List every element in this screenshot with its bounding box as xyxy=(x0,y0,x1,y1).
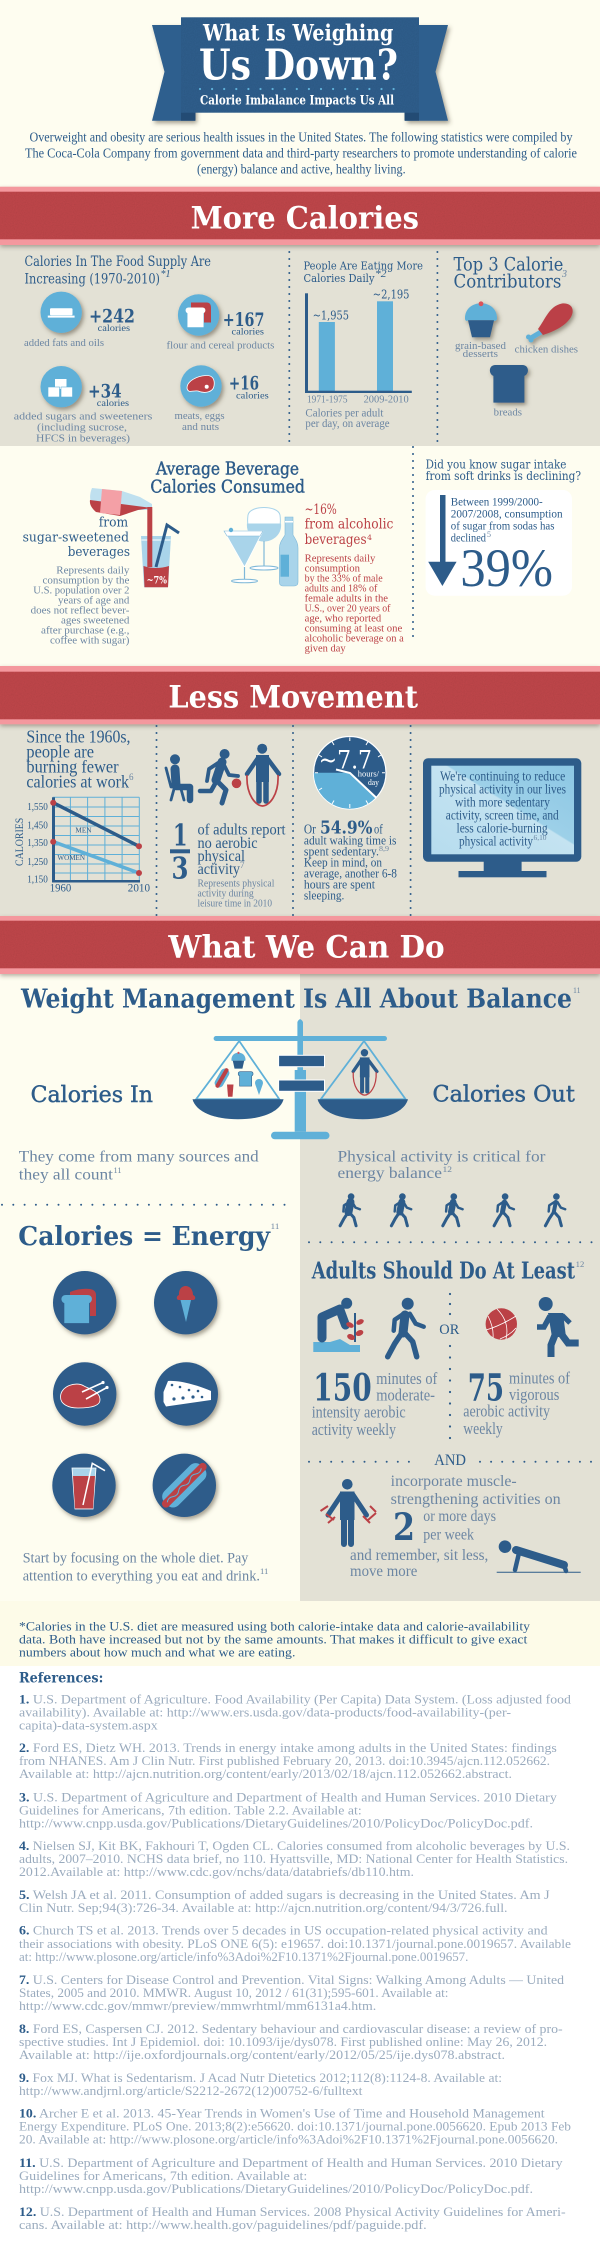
text: no aerobic activity: no aerobic xyxy=(198,835,258,852)
icon: clock: day xyxy=(368,778,379,787)
heading: since the 1960s: people are xyxy=(26,741,94,761)
text: 54.9%: Keep in mind, on xyxy=(304,855,382,870)
heading: adults should: 12 xyxy=(576,1260,584,1269)
icon: cupcake xyxy=(465,301,497,337)
icon: cheese xyxy=(155,1362,218,1426)
panel: top 3 calorie contributors xyxy=(454,254,578,419)
text: sugar-sweetened beverages: ages sweetened xyxy=(61,614,130,626)
text: muscle strengthening: and remember, sit less, xyxy=(350,1547,488,1564)
stat: 39%: 39% xyxy=(460,538,553,598)
references: 9. Fox MJ. What is Sedentarism. J Acad Nutr Dietetics 2012;112(8):1124-8. Available at: xyxy=(19,2071,502,2085)
chart caption xyxy=(305,406,390,430)
text: whole diet: attention to everything you eat and drink. xyxy=(23,1569,260,1585)
references: spective studies. Int J Epidemiol. doi: 10.1093/ije/dys078. First published online: May 26, 2012. xyxy=(19,2035,547,2049)
monitor text: less calorie-burning xyxy=(456,821,548,836)
bar chart: ~2,195 xyxy=(373,287,410,302)
stat: 150 minutes xyxy=(312,1366,438,1439)
text: alcoholic beverages: age, who reported xyxy=(305,613,382,625)
stat: 75 minutes: weekly xyxy=(463,1419,503,1438)
text: sugar-sweetened beverages: consumption by the xyxy=(42,574,130,586)
line chart: 1,550 xyxy=(27,801,48,813)
panel: calories in the food supply xyxy=(14,254,274,444)
callout text: declined xyxy=(451,532,486,544)
text: many sources: they all count xyxy=(19,1167,114,1184)
text: many sources xyxy=(19,1149,259,1184)
text: whole diet: Start by focusing on the whole diet. Pay xyxy=(23,1551,249,1567)
references: http://www.cdc.gov/mmwr/preview/mmwrhtml/mm6131a4.htm. xyxy=(19,1999,376,2013)
text: muscle strengthening: move more xyxy=(350,1563,417,1580)
item: added fats and oils: added fats and oils xyxy=(24,338,104,349)
text: alcoholic beverages: from alcoholic xyxy=(305,517,393,533)
monitor text: We're continuing to reduce xyxy=(440,769,565,784)
icon: down arrow xyxy=(428,495,457,586)
line chart: CALORIES xyxy=(14,818,26,866)
text: sugar-sweetened beverages: U.S. population over 2 xyxy=(33,584,129,596)
label: calories out: Calories Out xyxy=(432,1082,575,1107)
text: physical activity is critical xyxy=(338,1149,546,1182)
references: 5. Welsh JA et al. 2011. Consumption of added sugars is decreasing in the United States. Am J xyxy=(19,1888,550,1902)
icon: basketball xyxy=(486,1308,517,1340)
heading: calories = energy: Calories = Energy xyxy=(18,1222,271,1252)
panel: people are eating more calories daily xyxy=(304,258,423,430)
icon: chicken leg xyxy=(526,303,573,342)
references heading: References: xyxy=(19,1671,103,1687)
panel: adults should do at least xyxy=(309,1257,595,1580)
item: added fats and oils: calories xyxy=(98,323,131,333)
text: sugar-sweetened beverages: Represents daily xyxy=(56,564,130,576)
references: 7. U.S. Centers for Disease Control and Prevention. Vital Signs: Walking Among Adults — United xyxy=(19,1973,565,1987)
panel: burning fewer calories at work xyxy=(14,727,150,894)
stat: 150 minutes: intensity aerobic xyxy=(312,1402,406,1421)
stat: 75 minutes xyxy=(463,1366,570,1438)
references: http://www.cnpp.usda.gov/Publications/DietaryGuidelines/2010/PolicyDoc/PolicyDoc.pdf. xyxy=(19,2182,533,2196)
stat: one third: 1 xyxy=(173,819,188,854)
title ribbon xyxy=(152,17,448,121)
callout text: Between 1999/2000- xyxy=(451,496,543,508)
heading: top 3: Top 3 Calorie xyxy=(454,254,563,276)
text: sugar-sweetened beverages: sugar-sweetened xyxy=(23,530,129,545)
text: alcoholic beverages: given day xyxy=(305,643,346,655)
text: sugar-sweetened beverages: beverages xyxy=(68,545,130,560)
text: no aerobic activity: physical xyxy=(198,848,245,865)
stat: 75 minutes: 75 xyxy=(468,1366,504,1410)
section banner: More Calories: More Calories xyxy=(191,200,419,236)
references: 2. Ford ES, Dietz WH. 2013. Trends in energy intake among adults in the United States: findings xyxy=(19,1741,557,1755)
monitor text: physical activity in our lives xyxy=(439,782,566,797)
text: alcoholic beverages: U.S., over 20 years of xyxy=(305,603,391,615)
text: muscle strengthening: strengthening activities on xyxy=(391,1491,561,1508)
callout text: 5 xyxy=(487,530,491,539)
icon: push-up xyxy=(497,1540,581,1572)
references: http://www.andjrnl.org/article/S2212-2672(12)00752-6/fulltext xyxy=(19,2084,363,2098)
text: many sources: They come from many sources and xyxy=(19,1149,259,1166)
icon: runner with ball xyxy=(200,749,241,803)
line chart: 1,350 xyxy=(27,837,48,849)
text: muscle strengthening: 2 xyxy=(393,1505,415,1549)
icon: runner xyxy=(537,1297,579,1357)
note: leisure time: activity during xyxy=(198,889,254,900)
label: or: OR xyxy=(439,1322,459,1338)
line chart: 1,250 xyxy=(27,856,48,868)
item: added fats and oils xyxy=(24,292,135,349)
footnote: *Calories in the U.S. diet are measured using both calorie-intake data and calorie-availability xyxy=(19,1619,531,1634)
bar chart: 1971-1975 xyxy=(307,393,348,405)
text: 54.9%: of xyxy=(374,822,383,837)
heading: since the 1960s: burning fewer xyxy=(26,757,119,777)
intro text: (energy) balance and active, healthy living. xyxy=(197,161,406,176)
references: 1. U.S. Department of Agriculture. Food Availability (Per Capita) Data System. (Loss adjusted food xyxy=(19,1692,572,1706)
section banner: What We Can Do xyxy=(0,916,600,974)
item: meats, eggs and nuts: calories xyxy=(236,391,269,401)
icon: walker xyxy=(388,1298,424,1357)
references: 10. Archer E et al. 2013. 45-Year Trends in Women's Use of Time and Household Management xyxy=(19,2107,545,2121)
text: no aerobic activity xyxy=(198,822,286,878)
stat: 150 minutes: moderate- xyxy=(376,1386,435,1405)
text: alcoholic beverages: consumption xyxy=(305,563,360,575)
text: alcoholic beverages: Represents daily xyxy=(305,553,376,565)
text: muscle strengthening: or more days xyxy=(423,1508,496,1525)
heading: since the 1960s xyxy=(26,727,134,791)
item: meats, eggs and nuts: meats, eggs xyxy=(174,411,225,422)
heading: eating more: *2 xyxy=(375,269,386,280)
text: many sources: 11 xyxy=(114,1166,122,1175)
text: muscle strengthening: per week xyxy=(423,1526,474,1543)
text: sugar-sweetened beverages: after purchase (e.g., xyxy=(41,624,130,636)
item: added sugars and sweeteners: +34 xyxy=(88,380,122,402)
icon: bottle pouring into glass xyxy=(90,488,179,587)
heading: since the 1960s: 6 xyxy=(129,772,134,782)
icon: ice cream xyxy=(154,1271,217,1334)
heading: eating more: People Are Eating More xyxy=(304,258,423,272)
bar chart: 2009-2010 xyxy=(364,393,409,405)
text: muscle strengthening: incorporate muscle- xyxy=(391,1473,517,1490)
panel: sedentary waking time xyxy=(304,736,397,903)
equals sign xyxy=(279,1055,324,1091)
references: availability). Available at: http://www.ers.usda.gov/data-products/food-availability-(per- xyxy=(19,1705,511,1719)
line chart: WOMEN xyxy=(57,853,86,862)
heading: did you know: from soft drinks is declining? xyxy=(426,469,581,483)
section banner: Less Movement: Less Movement xyxy=(168,679,419,715)
references xyxy=(19,1671,572,2232)
line chart: 1,150 xyxy=(27,873,48,885)
panel: calories = energy xyxy=(18,1222,279,1585)
heading: eating more: Calories Daily xyxy=(304,271,375,285)
icon: sitting person xyxy=(166,754,190,800)
text: 54.9% xyxy=(304,817,397,903)
text: sugar-sweetened beverages: from xyxy=(99,516,128,531)
stat: one third xyxy=(170,819,190,886)
text: sugar-sweetened beverages: coffee with sugar) xyxy=(50,634,130,646)
heading: beverage calories: Calories Consumed xyxy=(150,476,305,497)
callout text: 2007/2008, consumption xyxy=(451,508,563,520)
stat: 75 minutes: aerobic activity xyxy=(463,1402,551,1421)
heading: food supply xyxy=(24,254,211,287)
line chart: 2010 xyxy=(128,880,150,894)
heading: food supply: Increasing (1970-2010) xyxy=(24,271,160,287)
heading: food supply: Calories In The Food Supply Are xyxy=(24,254,211,270)
contributor labels: desserts xyxy=(463,349,498,360)
heading: since the 1960s: Since the 1960s, xyxy=(26,727,130,747)
text: 54.9%: spent sedentary. xyxy=(304,844,379,859)
icon: gardener xyxy=(313,1298,365,1352)
intro text xyxy=(25,129,577,176)
references: Guidelines for Americans, 7th edition. Available at: xyxy=(19,2169,307,2183)
text: 54.9%: average, another 6-8 xyxy=(304,866,397,881)
text: no aerobic activity: of adults report xyxy=(198,822,286,839)
callout box xyxy=(426,490,572,596)
text: 54.9%: Or xyxy=(304,822,316,837)
monitor shape xyxy=(423,758,581,877)
text: alcoholic beverages: alcoholic beverage on a xyxy=(305,633,404,645)
heading: since the 1960s: calories at work xyxy=(26,771,129,791)
references: http://www.cnpp.usda.gov/Publications/DietaryGuidelines/2010/PolicyDoc/PolicyDoc.pdf. xyxy=(19,1816,533,1830)
item: added sugars and sweeteners: calories xyxy=(97,398,130,408)
text: whole diet xyxy=(23,1551,268,1585)
heading: top 3: Contributors xyxy=(454,271,561,293)
heading: calories = energy: 11 xyxy=(271,1222,279,1231)
item: flour and cereal products xyxy=(166,294,274,351)
title ribbon: Us Down? xyxy=(199,40,398,89)
heading: top 3: 3 xyxy=(561,269,567,280)
item: flour and cereal products: flour and cereal products xyxy=(166,340,274,351)
icon: soft drink xyxy=(52,1454,116,1517)
panel: one third of adults xyxy=(166,744,286,910)
panel: average beverage calories consumed xyxy=(23,458,404,655)
contributor labels xyxy=(455,341,578,419)
right pan with jumper xyxy=(318,1041,408,1119)
heading: beverage calories xyxy=(150,458,305,497)
text: alcoholic beverages: female adults in the xyxy=(305,593,388,605)
footnote: data. Both have increased but not by the same amounts. That makes it difficult to give exact xyxy=(19,1632,528,1647)
line chart: MEN xyxy=(75,825,92,834)
heading: weight management: 11 xyxy=(573,986,580,995)
chart caption: per day, on average xyxy=(305,416,390,430)
text: alcoholic beverages: consuming at least one xyxy=(305,623,402,635)
text: no aerobic activity: activity xyxy=(198,861,240,878)
references: 3. U.S. Department of Agriculture and Department of Health and Human Services. 2010 Dietary xyxy=(19,1790,558,1804)
item: added fats and oils: +242 xyxy=(89,306,135,328)
note: leisure time xyxy=(198,879,275,910)
item: meats, eggs and nuts: +16 xyxy=(229,373,259,395)
line chart: 1,450 xyxy=(27,819,48,831)
stat: 150 minutes: activity weekly xyxy=(312,1420,397,1439)
text: alcoholic beverages: 4 xyxy=(367,534,373,542)
text: whole diet: 11 xyxy=(260,1567,268,1576)
panel: computer monitor xyxy=(423,758,581,877)
left pan with foods xyxy=(192,1041,284,1119)
references: Available at: http://ije.oxfordjournals.org/content/early/2012/05/25/ije.dys078.abstract. xyxy=(19,2048,505,2062)
item: added sugars and sweeteners: (including sucrose, xyxy=(37,422,127,433)
references: capita)-data-system.aspx xyxy=(19,1719,159,1733)
icon: wine, martini and beer bottle xyxy=(224,508,298,586)
monitor text: physical activity xyxy=(459,834,533,849)
references: 11. U.S. Department of Agriculture and Department of Health and Human Services. 2010 Dietary xyxy=(19,2156,563,2170)
heading: food supply: *1 xyxy=(160,269,170,280)
references: Clin Nutr. Sep;94(3):726-34. Available at: http://ajcn.nutrition.org/content/94/3/726.full. xyxy=(19,1901,507,1915)
icon: bread xyxy=(53,1271,116,1334)
chart caption: Calories per adult xyxy=(305,406,384,420)
note: leisure time: Represents physical xyxy=(198,879,275,890)
icon: clock: ~7.7 xyxy=(319,746,372,775)
item: meats, eggs and nuts xyxy=(174,365,269,433)
text: sugar-sweetened beverages: does not reflect bever- xyxy=(31,604,130,616)
text: 54.9%: adult waking time is xyxy=(304,833,396,848)
item: added sugars and sweeteners xyxy=(14,366,152,444)
heading: beverage calories: Average Beverage xyxy=(155,458,299,479)
text: 54.9%: 8,9 xyxy=(379,844,389,853)
label: calories in: Calories In xyxy=(31,1083,153,1108)
monitor text xyxy=(439,769,566,849)
section banner: Less Movement xyxy=(0,666,600,724)
references: Guidelines for Americans, 7th edition. Table 2.2. Available at: xyxy=(19,1803,362,1817)
panel: sugar intake declining xyxy=(426,457,581,598)
references: States, 2005 and 2010. MMWR. August 10, 2012 / 61(31);595-601. Available at: xyxy=(19,1986,449,2000)
monitor text: 6,10 xyxy=(534,833,547,842)
callout text: of sugar from sodas has xyxy=(451,520,555,532)
references: their associations with obesity. PLoS ONE 6(5): e19657. doi:10.1371/journal.pone.0019657. Available xyxy=(19,1937,571,1951)
line chart xyxy=(14,797,150,894)
heading: did you know xyxy=(426,457,581,483)
icon: dumbbell lifter xyxy=(320,1479,376,1544)
stat: 75 minutes: minutes of xyxy=(509,1368,570,1387)
footnote xyxy=(19,1619,531,1660)
text: no aerobic activity: 7 xyxy=(240,860,245,870)
callout text xyxy=(451,496,563,544)
footnote: numbers about how much and what we are eating. xyxy=(19,1645,295,1660)
references: 2012.Available at: http://www.cdc.gov/nchs/data/databriefs/db110.htm. xyxy=(19,1865,414,1879)
stat: 75 minutes: vigorous xyxy=(509,1385,559,1404)
references: at: http://www.plosone.org/article/info%3Adoi%2F10.1371%2Fjournal.pone.0019657. xyxy=(19,1950,468,1964)
section banner: More Calories xyxy=(0,187,600,245)
item: added sugars and sweeteners: HFCS in beverages) xyxy=(36,433,131,444)
item: flour and cereal products: +167 xyxy=(223,309,264,331)
text: physical activity is critical: energy balance xyxy=(338,1165,442,1182)
icon: clock xyxy=(314,736,386,809)
line chart: 1960 xyxy=(50,880,71,894)
text: alcoholic beverages: by the 33% of male xyxy=(305,573,383,585)
icon: roast chicken xyxy=(53,1362,116,1426)
references: cans. Available at: http://www.health.gov/paguidelines/pdf/paguide.pdf. xyxy=(19,2218,427,2232)
references: Energy Expenditure. PLoS One. 2013;8(2):e56620. doi:10.1371/journal.pone.0056620. Epub 2013 Feb xyxy=(19,2120,571,2134)
row of five walkers xyxy=(340,1193,565,1226)
text: muscle strengthening xyxy=(350,1473,561,1580)
bar chart: ~1,955 xyxy=(313,307,349,322)
icon: bottle pouring into glass: ~7% xyxy=(147,574,167,586)
note: leisure time: leisure time in 2010 xyxy=(198,899,272,910)
text: physical activity is critical: Physical activity is critical for xyxy=(338,1149,546,1166)
text: 54.9%: hours are spent xyxy=(304,877,375,892)
text: physical activity is critical: 12 xyxy=(442,1165,452,1174)
text: alcoholic beverages: beverages xyxy=(305,532,367,548)
text: sugar-sweetened beverages: years of age and xyxy=(58,594,130,606)
references: 8. Ford ES, Caspersen CJ. 2012. Sedentary behaviour and cardiovascular disease: a review of pro- xyxy=(19,2022,563,2036)
icon: jump rope xyxy=(247,744,279,806)
text: 54.9%: sleeping. xyxy=(304,888,344,903)
text: alcoholic beverages xyxy=(305,502,404,655)
monitor text: with more sedentary xyxy=(455,795,550,810)
icon: bread xyxy=(490,365,528,403)
text: sugar-sweetened beverages xyxy=(23,516,130,646)
icon: hot dog xyxy=(153,1454,216,1517)
text: alcoholic beverages: ~16% xyxy=(305,502,337,518)
item: flour and cereal products: calories xyxy=(232,326,265,336)
references: 6. Church TS et al. 2013. Trends over 5 decades in US occupation-related physical activity and xyxy=(19,1924,548,1938)
contributor labels: grain-based xyxy=(455,341,507,352)
title ribbon: Calorie Imbalance Impacts Us All xyxy=(200,94,394,109)
section banner: What We Can Do: What We Can Do xyxy=(167,929,445,965)
contributor labels: breads xyxy=(494,408,522,419)
references: 20. Available at: http://www.plosone.org/article/info%3Adoi%2F10.1371%2Fjournal.pone.0056620. xyxy=(19,2133,558,2147)
text: 54.9%: 54.9% xyxy=(320,817,372,838)
label: and: AND xyxy=(434,1452,466,1469)
heading: did you know: Did you know sugar intake xyxy=(426,457,566,471)
references: from NHANES. Am J Clin Nutr. First published February 20, 2013. doi:10.3945/ajcn.112.052662. xyxy=(19,1754,550,1768)
text: alcoholic beverages: adults and 18% of xyxy=(305,583,378,595)
bar chart xyxy=(305,287,412,405)
references: adults, 2007–2010. NCHS data brief, no 110. Hyattsville, MD: National Center for Health Statistics. xyxy=(19,1852,568,1866)
icon: clock: hours/ xyxy=(358,770,380,779)
stat: one third: 3 xyxy=(172,851,188,886)
title ribbon: What Is Weighing xyxy=(202,21,393,47)
monitor text: activity, screen time, and xyxy=(446,808,559,823)
references: Available at: http://ajcn.nutrition.org/content/early/2013/02/18/ajcn.112.052662.abstract. xyxy=(19,1767,512,1781)
contributor labels: chicken dishes xyxy=(515,344,578,355)
references: 4. Nielsen SJ, Kit BK, Fakhouri T, Ogden CL. Calories consumed from alcoholic beverages by U.S. xyxy=(19,1839,570,1853)
heading: eating more xyxy=(304,258,423,285)
item: meats, eggs and nuts: and nuts xyxy=(182,422,219,433)
heading: top 3 xyxy=(454,254,567,293)
references: 12. U.S. Department of Health and Human Services. 2008 Physical Activity Guidelines for Ameri- xyxy=(19,2205,566,2219)
item: added sugars and sweeteners: added sugars and sweeteners xyxy=(14,411,152,422)
stat: 150 minutes: minutes of xyxy=(376,1369,438,1388)
balance scale xyxy=(192,1019,408,1139)
stat: 150 minutes: 150 xyxy=(313,1366,372,1410)
